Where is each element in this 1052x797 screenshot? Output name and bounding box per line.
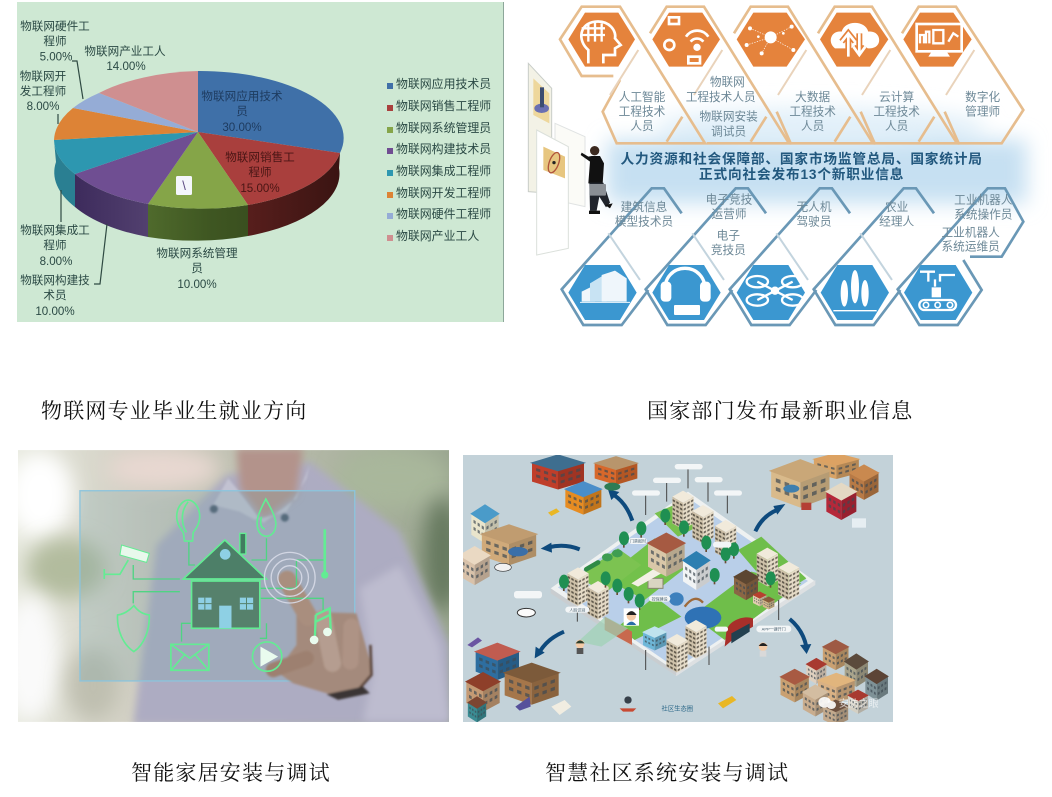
small white marker (176, 176, 192, 195)
callout labels: 控保建设 (652, 595, 668, 601)
callout labels: 社区生态圈 (662, 704, 693, 713)
thin diagonals (608, 233, 892, 280)
sector arrows (540, 495, 806, 652)
job labels top: 调试员 (711, 124, 746, 138)
legend: 物联网构建技术员 (396, 142, 491, 156)
icon: music note (310, 608, 332, 644)
orange icon hexagons (568, 13, 972, 67)
cluster: logistics (465, 643, 571, 722)
job labels top: 人员 (630, 120, 654, 133)
legend (387, 77, 491, 243)
photo background (0, 448, 463, 722)
icon: house (183, 533, 266, 628)
caption: national new occupations: 国家部门发布最新职业信息 (647, 399, 913, 423)
watermark: 安防之眼 (839, 697, 879, 710)
legend: 物联网开发工程师 (396, 186, 491, 200)
small white marker: \ (182, 178, 186, 193)
gates (578, 617, 753, 647)
job labels top: 工程技术 (873, 106, 920, 119)
sensors, street lamps and labels (577, 468, 779, 670)
callout labels: 门禁报时 (630, 538, 646, 544)
pie labels: 物联网产业工人 (84, 44, 166, 58)
headline (621, 150, 983, 182)
blue outlines (562, 188, 1023, 325)
pie labels: 物联网集成工 (20, 223, 90, 237)
pie labels: 物联网开 (20, 69, 66, 83)
legend: 物联网硬件工程师 (396, 207, 491, 221)
pie labels: 15.00% (240, 182, 280, 195)
pie labels (20, 19, 295, 318)
icon: envelope (171, 644, 209, 670)
people and vehicles (467, 508, 768, 712)
job labels bottom: 模型技术员 (615, 215, 673, 229)
job labels top: 管理师 (965, 105, 1000, 119)
floating glass panels (528, 63, 585, 255)
pie labels: 术员 (43, 289, 67, 302)
pie labels: 8.00% (27, 100, 59, 113)
job labels bottom: 农业 (885, 200, 908, 214)
panel: smart home photo (18, 450, 449, 722)
translucent panel (80, 491, 355, 681)
icon: digital monitor (917, 24, 962, 57)
pie labels: 员 (236, 105, 248, 118)
job labels bottom: 无人机 (797, 200, 832, 214)
cluster: residential houses (779, 639, 889, 726)
job labels bottom: 运营师 (712, 207, 747, 221)
job labels bottom: 电子 (717, 229, 740, 242)
legend: 物联网集成工程师 (396, 164, 491, 178)
job labels top: 人员 (801, 120, 824, 133)
job labels bottom: 工业机器人 (942, 226, 1000, 240)
orange outlines (560, 7, 1023, 143)
job labels bottom (615, 192, 1013, 257)
icon: wheat (833, 270, 877, 311)
pie labels: 程师 (43, 239, 67, 252)
job labels bottom: 系统操作员 (954, 208, 1012, 222)
icon: big data network (745, 25, 795, 55)
pie labels: 5.00% (40, 50, 72, 64)
job labels bottom: 电子竞技 (706, 192, 753, 206)
pie labels: 发工程师 (20, 84, 66, 98)
pie labels: 物联网应用技术 (201, 89, 283, 103)
icon: play button (252, 642, 282, 671)
job labels bottom: 建筑信息 (621, 200, 668, 214)
watermark (818, 697, 879, 710)
callout labels: 人脸识别 (569, 606, 585, 612)
cluster: shops (530, 454, 639, 515)
pie labels: 物联网系统管理 (156, 246, 238, 260)
job labels top: 物联网 (710, 75, 745, 89)
cluster: hospital (769, 453, 880, 528)
icon: AI head (581, 22, 621, 63)
callout labels (514, 464, 791, 713)
hand (273, 580, 373, 700)
legend: 物联网销售工程师 (396, 99, 491, 113)
businessman figure (581, 146, 613, 214)
pale blue band (607, 107, 1027, 203)
arrowheads (535, 489, 811, 658)
panel: new occupations hexagon infographic (528, 7, 1027, 325)
pie labels: 10.00% (177, 278, 217, 291)
community platform (551, 492, 815, 676)
icon: water drop (257, 499, 276, 536)
job labels top: 数字化 (965, 90, 1000, 104)
pie labels: 员 (191, 262, 203, 275)
icon: security camera (104, 545, 149, 579)
pie labels: 程师 (43, 35, 67, 48)
caption: smart community: 智慧社区系统安装与调试 (545, 761, 789, 785)
cluster: police (458, 504, 538, 585)
job labels top: 大数据 (795, 90, 830, 104)
legend: 物联网系统管理员 (396, 121, 491, 135)
background (463, 455, 893, 722)
pie labels: 14.00% (106, 60, 146, 73)
legend: 物联网产业工人 (396, 229, 479, 243)
icon: drone (747, 276, 803, 306)
icon: connector lines (133, 538, 325, 642)
pie labels: 物联网销售工 (225, 150, 295, 164)
chart: 3D pie (54, 71, 344, 241)
job labels top: 物联网安装 (700, 110, 758, 124)
icon: thermometer (321, 529, 328, 579)
headline: 人力资源和社会保障部、国家市场监管总局、国家统计局 (621, 150, 983, 166)
job labels top: 工程技术 (789, 106, 836, 119)
caption: smart home: 智能家居安装与调试 (131, 761, 331, 785)
icon: cloud with arrows (831, 23, 879, 57)
job labels bottom: 工业机器人 (954, 193, 1013, 207)
job labels top: 人员 (885, 120, 908, 133)
icon: robot on conveyor (919, 272, 956, 310)
job labels top (619, 75, 1000, 138)
icon: buildings (580, 271, 630, 302)
panel: smart community illustration (463, 455, 893, 722)
pie labels: 30.00% (222, 121, 262, 134)
blue icon hexagons (568, 265, 972, 320)
callout labels: APP一键开门 (762, 626, 786, 632)
central houses and trees (559, 509, 776, 650)
icon: touch rings (264, 552, 315, 603)
icon: headset and keyboard (661, 268, 711, 315)
pie labels: 程师 (248, 166, 272, 179)
leader lines (58, 61, 107, 284)
pie labels: 8.00% (40, 255, 72, 268)
icon: IoT wifi (664, 17, 708, 63)
pie labels: 物联网硬件工 (20, 19, 90, 33)
icon: shield (117, 606, 149, 652)
panel: pie chart of IoT graduate employment directions (17, 2, 504, 322)
job labels top: 工程技术人员 (686, 91, 756, 104)
pie labels: 10.00% (35, 305, 75, 318)
job labels top: 工程技术 (619, 106, 666, 119)
job labels bottom: 系统运维员 (942, 241, 1000, 254)
pie labels: 物联网构建技 (20, 273, 90, 287)
headline: 正式向社会发布13个新职业信息 (699, 166, 904, 182)
man in shirt (133, 448, 450, 725)
job labels bottom: 经理人 (879, 216, 914, 229)
job labels bottom: 竞技员 (711, 243, 746, 257)
job labels top: 人工智能 (619, 90, 666, 104)
caption: IoT graduate directions: 物联网专业毕业生就业方向 (41, 399, 307, 423)
job labels bottom: 驾驶员 (797, 215, 831, 229)
icon: light bulb (177, 500, 200, 541)
residential towers (567, 491, 799, 673)
job labels top: 云计算 (879, 90, 914, 104)
legend: 物联网应用技术员 (396, 77, 491, 91)
